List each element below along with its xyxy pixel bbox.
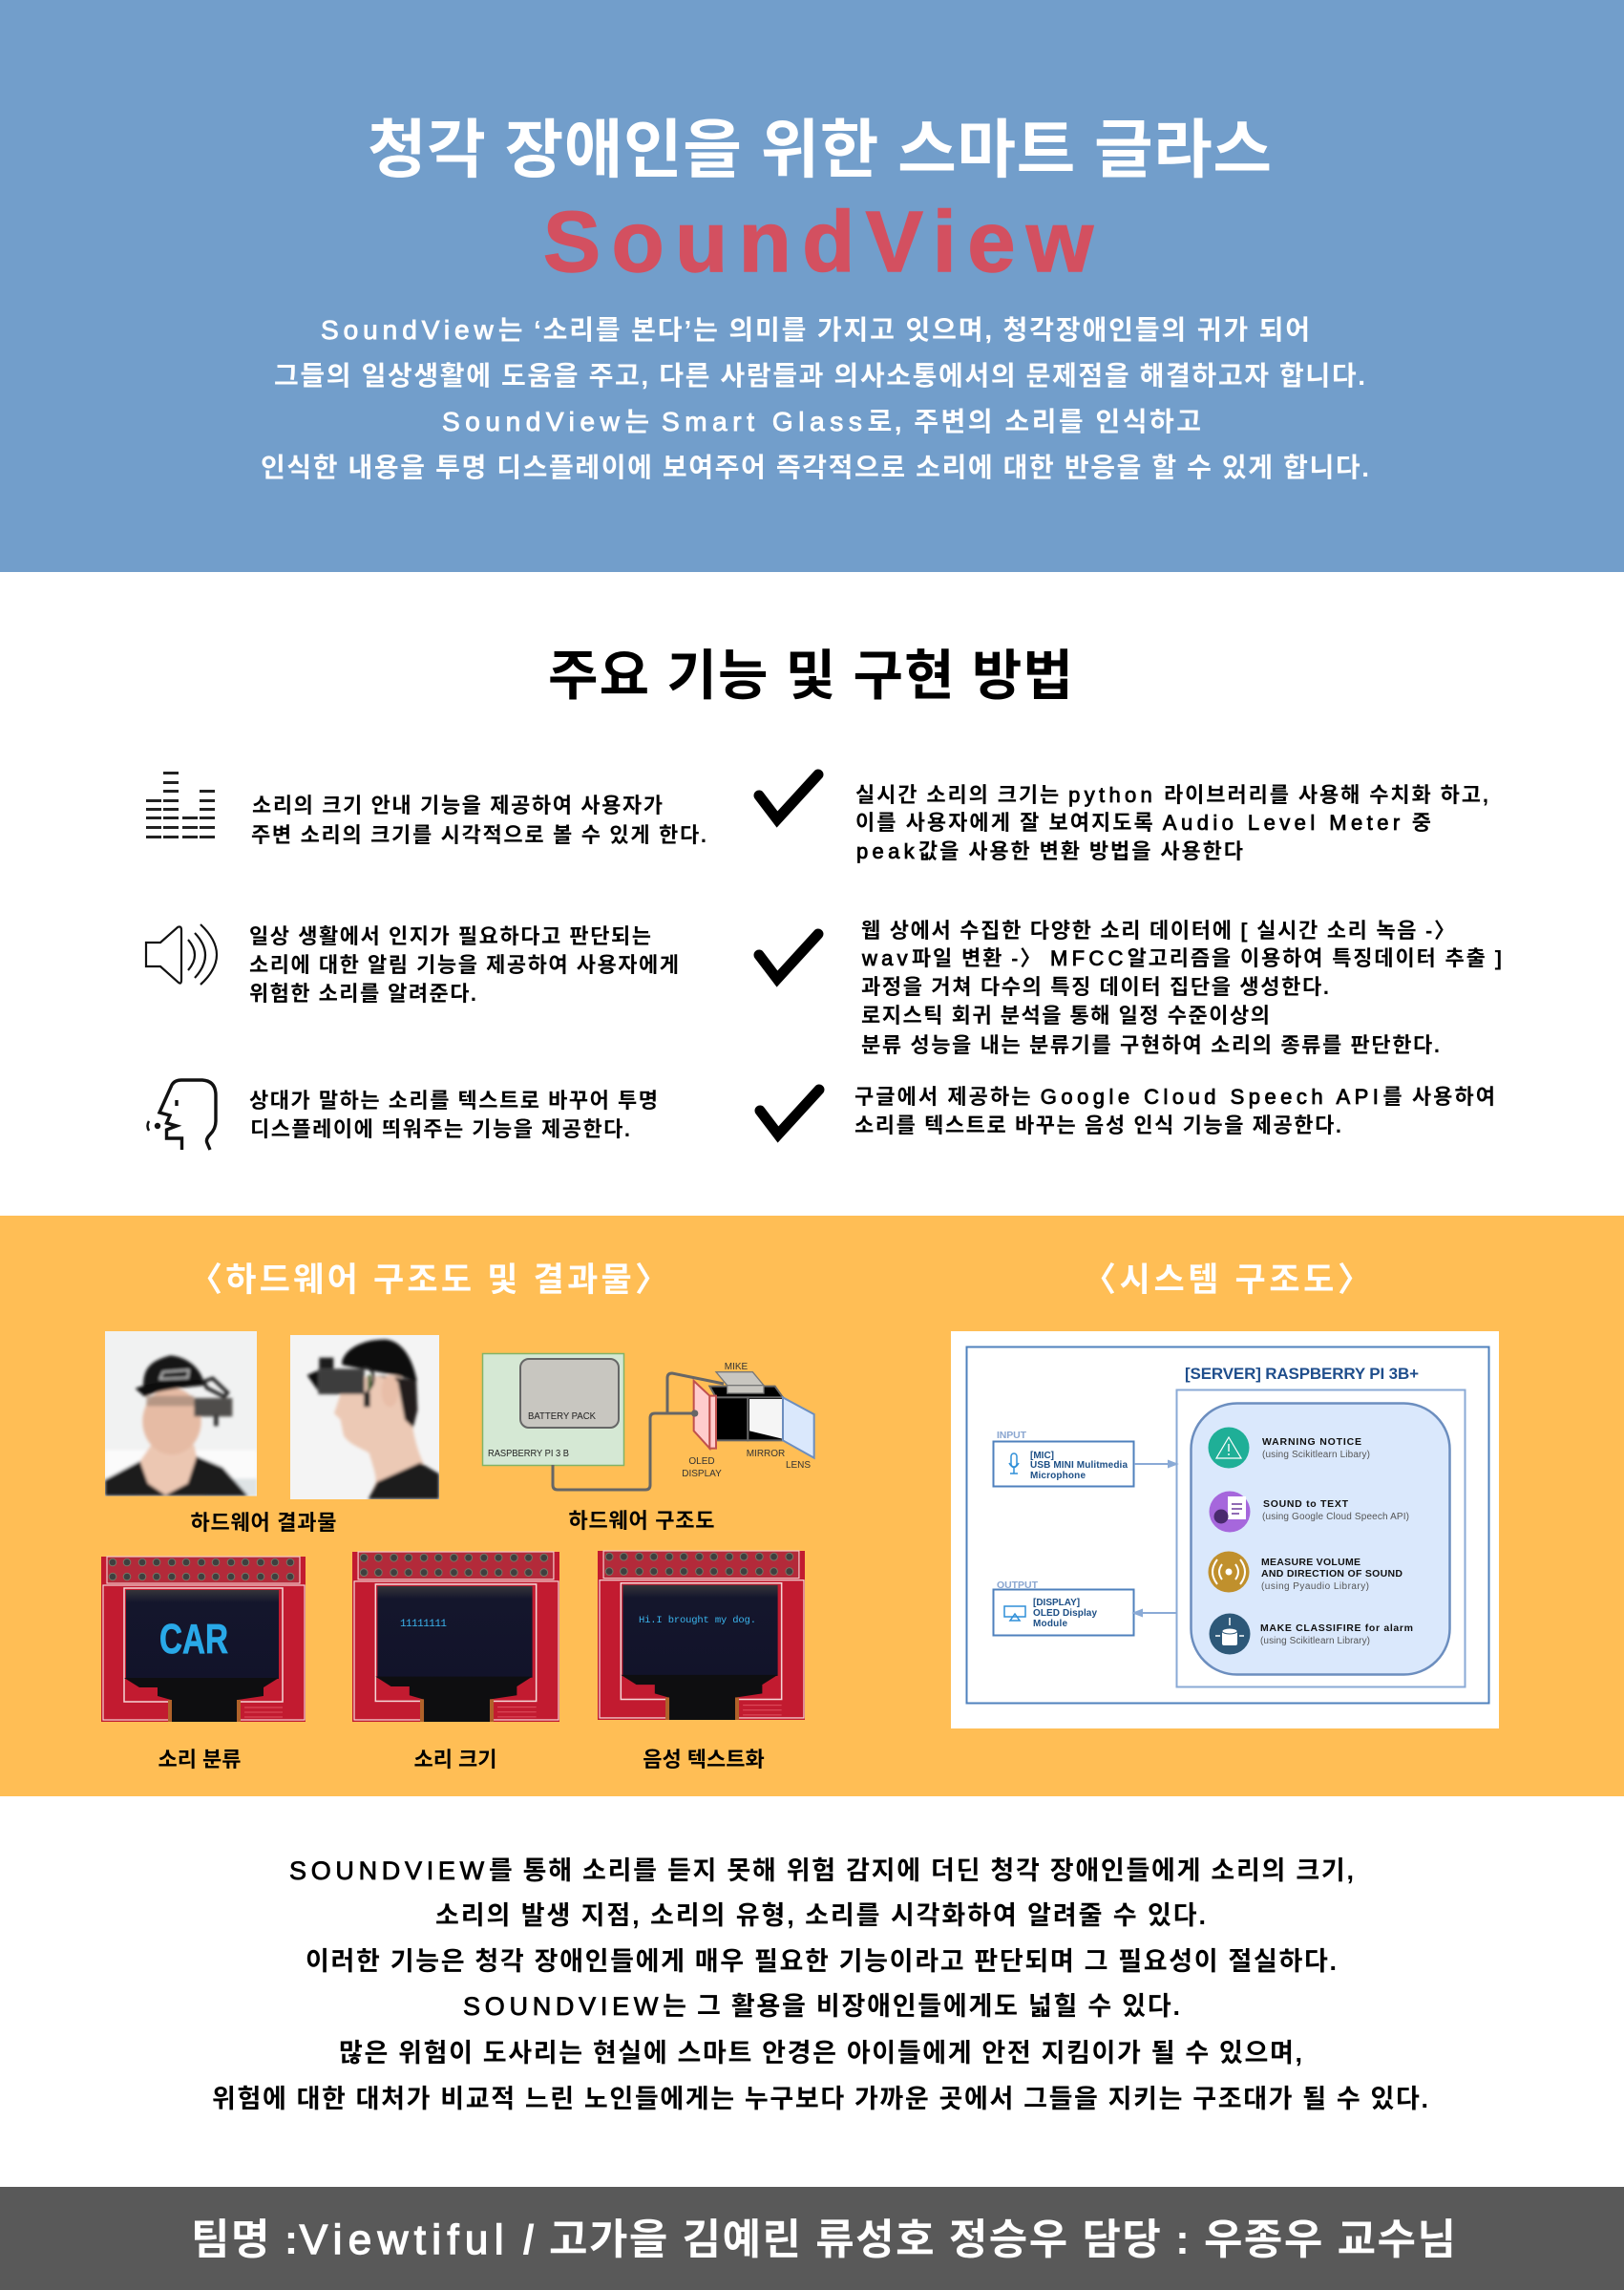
- server title: [SERVER] RASPBERRY PI 3B+: [1185, 1365, 1419, 1383]
- icon: check 1: [759, 774, 818, 819]
- footer: [0, 2187, 1624, 2290]
- text: volume feature: 소리의 크기 안내 기능을 제공하여 사용자가: [252, 794, 663, 817]
- text: measure volume: AND DIRECTION OF SOUND: [1261, 1568, 1403, 1580]
- text: classifier implementation: [861, 919, 1502, 1057]
- intro text: [261, 315, 1369, 482]
- text: alert feature: 위험한 소리를 알려준다.: [249, 982, 476, 1006]
- panel: hardware and system: [0, 1216, 1624, 1796]
- text: speech implementation: [854, 1085, 1495, 1137]
- text: volume feature: [251, 794, 707, 847]
- text: classifier: MAKE CLASSIFIRE for alarm: [1260, 1622, 1413, 1634]
- text: volume implementation: [855, 783, 1488, 863]
- icon: classifier: [1209, 1614, 1251, 1654]
- optics labels: OLED: [688, 1456, 715, 1467]
- server modules: [1192, 1404, 1449, 1675]
- text: alert feature: 일상 생활에서 인지가 필요하다고 판단되는: [249, 924, 651, 948]
- caption: sound level: 소리 크기: [413, 1748, 497, 1771]
- optics labels: LENS: [786, 1460, 811, 1471]
- caption: sound classification: 소리 분류: [158, 1748, 242, 1771]
- input block: USB MINI Mulitmedia: [1030, 1460, 1128, 1471]
- text: classifier implementation: wav파일 변환 -〉 MFCC알고리즘을 이용하여 특징데이터 추출 ]: [861, 946, 1502, 970]
- icon: level meter: [146, 772, 215, 838]
- caption: hardware structure: 하드웨어 구조도: [569, 1509, 714, 1533]
- intro text: 그들의 일상생활에 도움을 주고, 다른 사람들과 의사소통에서의 문제점을 해결하고자 합니다.: [274, 361, 1365, 391]
- text block: conclusion: 위험에 대한 대처가 비교적 느린 노인들에게는 누구보다 가까운 곳에서 그들을 지키는 구조대가 될 수 있다.: [212, 2085, 1428, 2113]
- input block: Microphone: [1030, 1471, 1086, 1481]
- photo: speech to text display: [598, 1551, 805, 1720]
- text: warning notice: (using Scikitlearn Libary): [1262, 1450, 1370, 1460]
- icon: microphone: [1009, 1453, 1019, 1474]
- photo: sound level display: 11111111: [400, 1619, 447, 1630]
- icon: document: [1209, 1492, 1251, 1532]
- text block: conclusion: SOUNDVIEW를 통해 소리를 듣지 못해 위험 감지에 더딘 청각 장애인들에게 소리의 크기,: [289, 1856, 1354, 1885]
- panel: features: [146, 772, 1502, 1150]
- raspberry pi box: BATTERY PACK: [528, 1411, 596, 1422]
- diagram: system structure: [951, 1331, 1499, 1728]
- input block: INPUT: [997, 1430, 1027, 1441]
- raspberry pi box: [483, 1354, 624, 1465]
- icon: check 3: [760, 1090, 819, 1134]
- text: sound to text: [1262, 1498, 1409, 1522]
- photo: speech to text display: Hi.I brought my dog.: [639, 1615, 756, 1626]
- text: speech implementation: 구글에서 제공하는 Google Cloud Speech API를 사용하여: [854, 1085, 1495, 1109]
- text: sound to text: SOUND to TEXT: [1263, 1498, 1349, 1510]
- input block: [MIC]: [1030, 1451, 1054, 1461]
- cables: [553, 1373, 724, 1490]
- heading: system: 〈시스템 구조도〉: [1083, 1262, 1371, 1299]
- text block: conclusion: 이러한 기능은 청각 장애인들에게 매우 필요한 기능이라고 판단되며 그 필요성이 절실하다.: [306, 1947, 1337, 1976]
- output block: [DISPLAY]: [1033, 1598, 1080, 1608]
- icon: speaker: [146, 924, 217, 985]
- text: volume feature: 주변 소리의 크기를 시각적으로 볼 수 있게 한다.: [251, 823, 707, 847]
- diagram: hardware structure: [483, 1354, 814, 1490]
- optics module: [691, 1372, 814, 1458]
- text: measure volume: MEASURE VOLUME: [1261, 1557, 1360, 1568]
- photo: sound classification display: [101, 1557, 306, 1722]
- optics labels: [682, 1362, 811, 1479]
- text: speech implementation: 소리를 텍스트로 바꾸는 음성 인식 기능을 제공한다.: [854, 1113, 1341, 1137]
- photo: side view: [290, 1335, 439, 1499]
- text: alert feature: [249, 924, 679, 1006]
- optics labels: DISPLAY: [682, 1469, 722, 1479]
- raspberry pi box: RASPBERRY PI 3 B: [488, 1449, 569, 1459]
- project name: SoundView: [543, 195, 1094, 290]
- text: volume implementation: 이를 사용자에게 잘 보여지도록 Audio Level Meter 중: [855, 811, 1431, 835]
- output block: Module: [1033, 1619, 1067, 1629]
- text: volume implementation: peak값을 사용한 변환 방법을 사용한다: [856, 839, 1243, 863]
- text: classifier implementation: 분류 성능을 내는 분류기를 구현하여 소리의 종류를 판단한다.: [861, 1033, 1440, 1057]
- optics labels: MIRROR: [747, 1449, 785, 1459]
- icon: check 2: [759, 934, 818, 979]
- text block: conclusion: SOUNDVIEW는 그 활용을 비장애인들에게도 넓힐 수 있다.: [463, 1992, 1180, 2021]
- footer: 팀명 :Viewtiful / 고가을 김예린 류성호 정승우 담당 : 우종우 교수님: [191, 2216, 1456, 2263]
- caption: speech to text: 음성 텍스트화: [643, 1748, 765, 1771]
- photo: front view: [105, 1331, 257, 1496]
- output block: [993, 1580, 1134, 1635]
- text: classifier implementation: 과정을 거쳐 다수의 특징 데이터 집단을 생성한다.: [861, 975, 1329, 999]
- text: speech feature: 상대가 말하는 소리를 텍스트로 바꾸어 투명: [249, 1089, 658, 1113]
- output block: OLED Display: [1033, 1608, 1097, 1619]
- panel: header: [0, 0, 1624, 572]
- icon: speaking head: [147, 1080, 216, 1150]
- text: classifier implementation: 웹 상에서 수집한 다양한 소리 데이터에 [ 실시간 소리 녹음 -〉: [861, 919, 1455, 943]
- icon: display: [1004, 1606, 1025, 1621]
- heading: main features: 주요 기능 및 구현 방법: [548, 646, 1073, 707]
- intro text: SoundView는 Smart Glass로, 주변의 소리를 인식하고: [442, 407, 1201, 436]
- text: warning notice: WARNING NOTICE: [1262, 1436, 1361, 1448]
- text: classifier implementation: 로지스틱 회귀 분석을 통해 일정 수준이상의: [861, 1004, 1270, 1028]
- text block: conclusion: 많은 위험이 도사리는 현실에 스마트 안경은 아이들에게 안전 지킴이가 될 수 있으며,: [339, 2039, 1302, 2067]
- output block: OUTPUT: [997, 1580, 1039, 1591]
- text: speech feature: 디스플레이에 띄워주는 기능을 제공한다.: [250, 1117, 630, 1141]
- text: classifier: [1260, 1622, 1413, 1646]
- heading: hardware: 〈하드웨어 구조도 및 결과물〉: [189, 1262, 668, 1299]
- icon: warning: [1209, 1427, 1249, 1469]
- text block: conclusion: 소리의 발생 지점, 소리의 유형, 소리를 시각화하여 알려줄 수 있다.: [435, 1901, 1206, 1930]
- text: classifier: (using Scikitlearn Library): [1260, 1636, 1370, 1646]
- text: speech feature: [249, 1089, 658, 1141]
- text: warning notice: [1262, 1436, 1370, 1460]
- photo: sound classification display: CAR: [159, 1616, 228, 1663]
- text: alert feature: 소리에 대한 알림 기능을 제공하여 사용자에게: [249, 953, 679, 977]
- icon: volume: [1209, 1551, 1249, 1593]
- input block: [993, 1430, 1134, 1486]
- text block: conclusion: [212, 1856, 1428, 2113]
- optics labels: MIKE: [725, 1362, 749, 1372]
- arrow: output: [1134, 1610, 1176, 1616]
- text: measure volume: [1261, 1557, 1403, 1592]
- caption: hardware result: 하드웨어 결과물: [191, 1511, 336, 1535]
- text: volume implementation: 실시간 소리의 크기는 python 라이브러리를 사용해 수치화 하고,: [855, 783, 1488, 807]
- intro text: 인식한 내용을 투명 디스플레이에 보여주어 즉각적으로 소리에 대한 반응을 할 수 있게 합니다.: [261, 453, 1369, 482]
- intro text: SoundView는 ‘소리를 본다’는 의미를 가지고 잇으며, 청각장애인들의 귀가 되어: [321, 315, 1310, 345]
- text: measure volume: (using Pyaudio Library): [1261, 1581, 1369, 1592]
- title: 청각 장애인을 위한 스마트 글라스: [368, 115, 1272, 186]
- text: sound to text: (using Google Cloud Speech API): [1262, 1512, 1409, 1522]
- arrow: input: [1134, 1461, 1176, 1467]
- photo: sound level display: [352, 1552, 559, 1722]
